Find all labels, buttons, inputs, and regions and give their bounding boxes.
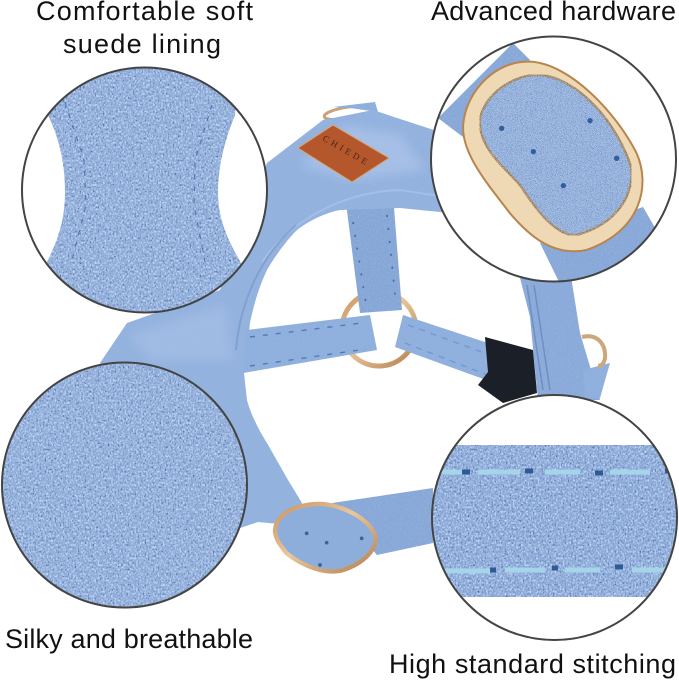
right chest strap bbox=[395, 315, 500, 385]
circle base bbox=[432, 395, 677, 640]
upper stitching bbox=[440, 470, 650, 474]
body highlight bbox=[130, 305, 232, 360]
side D-ring bbox=[582, 336, 605, 366]
circle base bbox=[431, 36, 676, 282]
top loop strap bbox=[333, 102, 378, 112]
circle outline bbox=[22, 68, 267, 312]
buckle frame and fill bbox=[275, 504, 376, 571]
yoke highlight bbox=[300, 125, 425, 180]
circle base bbox=[22, 68, 267, 312]
fabric disc bbox=[2, 362, 247, 608]
yoke and body bbox=[100, 110, 450, 528]
fabric straps bbox=[100, 110, 610, 555]
stitch holes bbox=[462, 471, 671, 570]
stitch marks bbox=[502, 121, 617, 186]
lining fabric bbox=[47, 68, 242, 312]
label: silky and breathable: Silky and breathable bbox=[5, 624, 253, 654]
tag plate bbox=[298, 125, 389, 182]
frame bbox=[463, 62, 642, 251]
strap through buckle bbox=[480, 75, 631, 235]
lower strap bbox=[540, 207, 654, 280]
right strap stitching bbox=[405, 325, 490, 376]
zoom circle: suede lining bbox=[21, 66, 268, 314]
left strap stitching bbox=[250, 323, 366, 366]
line 2: suede lining bbox=[63, 29, 221, 59]
top D-ring bbox=[323, 104, 375, 122]
label: comfortable soft suede lining bbox=[36, 0, 253, 59]
circle outline bbox=[2, 362, 247, 608]
black buckle bbox=[478, 337, 537, 403]
right side strap bbox=[518, 270, 600, 400]
leather tag bbox=[298, 125, 389, 182]
circle outline bbox=[431, 36, 676, 282]
centre strap stitching bbox=[353, 215, 396, 310]
zoom circle: hardware bbox=[431, 36, 676, 290]
zoom circle: silky fabric bbox=[2, 362, 247, 608]
lower stitching bbox=[445, 570, 668, 571]
oval buckle bbox=[463, 62, 642, 251]
centre ring bbox=[342, 292, 416, 366]
fabric band bbox=[420, 445, 679, 597]
circle outline bbox=[432, 395, 677, 640]
arch shadow seam bbox=[236, 225, 296, 350]
lining stitch lines bbox=[65, 102, 212, 262]
straps bbox=[438, 43, 665, 290]
label: high standard stitching: High standard stitching bbox=[389, 649, 676, 679]
lower band bbox=[332, 488, 433, 555]
band contents bbox=[420, 445, 679, 597]
left chest strap bbox=[243, 315, 377, 373]
right strap creases bbox=[527, 285, 550, 390]
buckle stitches bbox=[307, 533, 362, 565]
zoom circle: stitching bbox=[420, 395, 679, 640]
harness product photo bbox=[100, 102, 610, 571]
yoke seam bbox=[262, 190, 440, 262]
bottom buckle bbox=[275, 504, 376, 571]
tag brand text: CHIEDE bbox=[321, 133, 370, 167]
upper strap bbox=[438, 43, 530, 137]
D-ring tab bbox=[583, 363, 610, 398]
centre vertical strap bbox=[345, 195, 402, 313]
